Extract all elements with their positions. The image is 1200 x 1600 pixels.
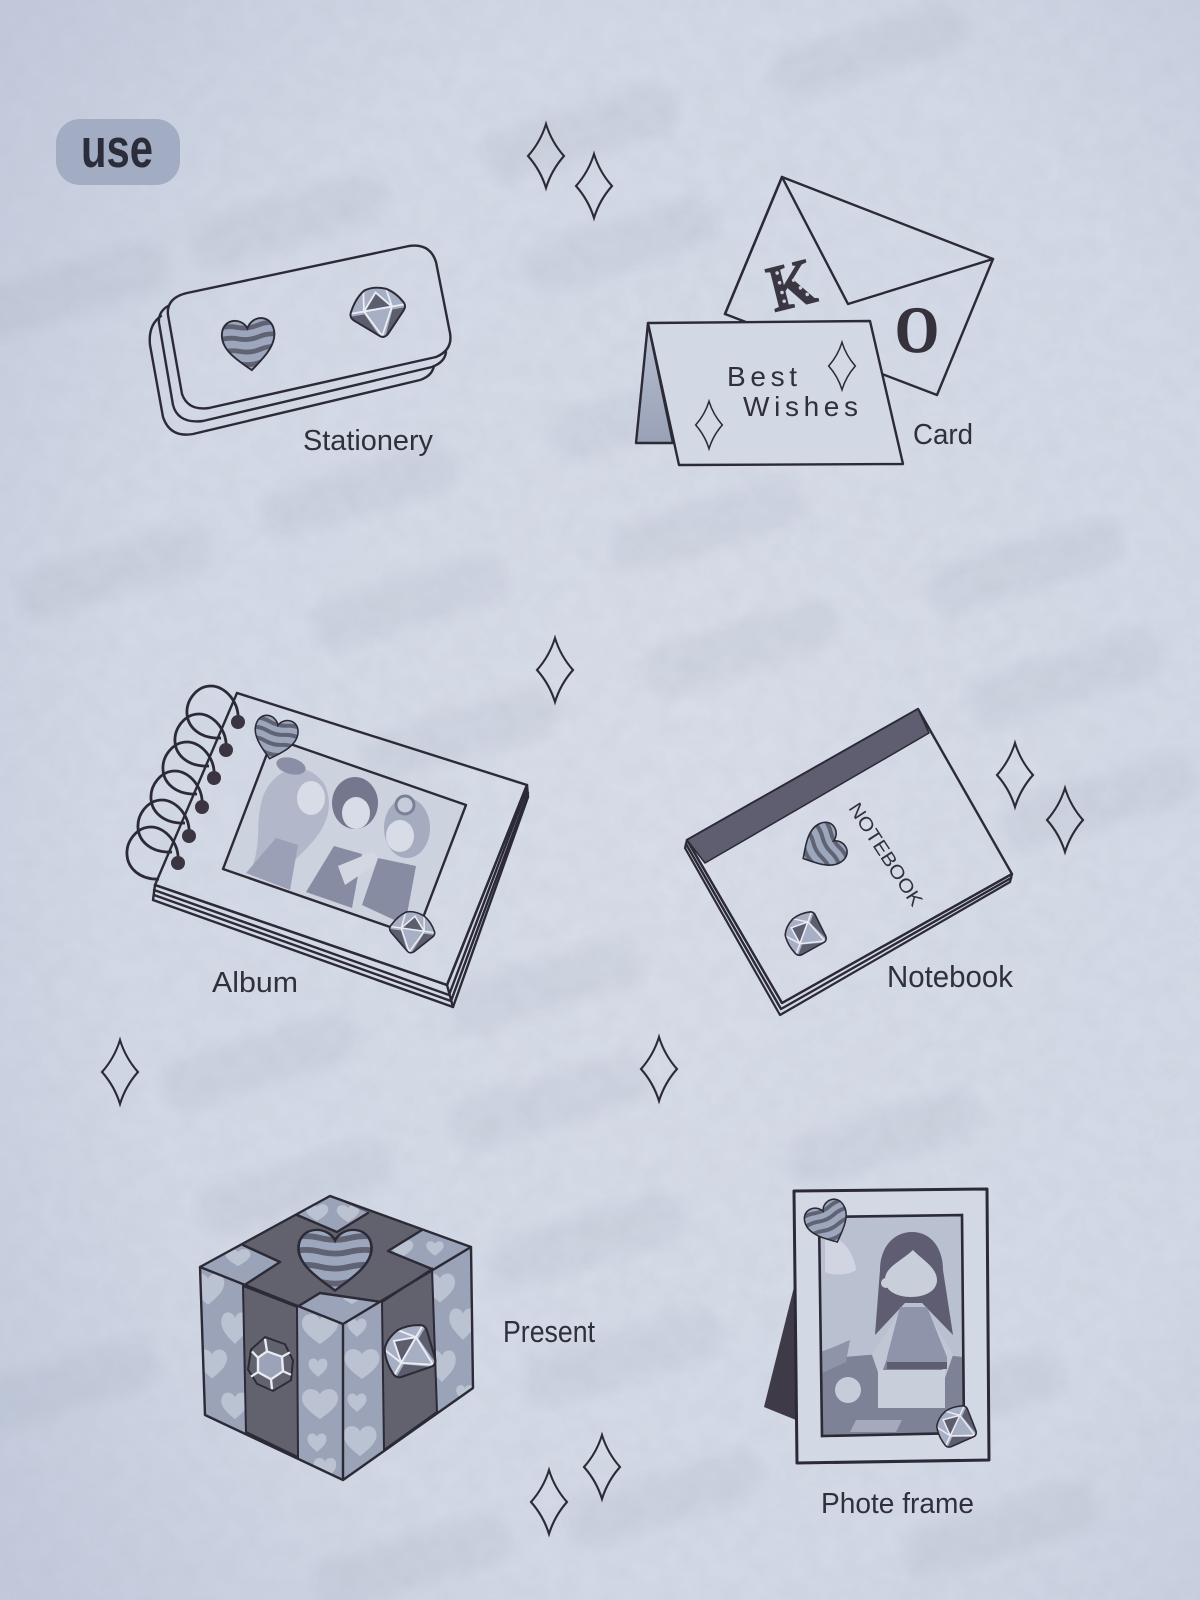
sparkle bbox=[584, 1435, 620, 1499]
icon: striped heart bbox=[215, 316, 283, 373]
item: stationery bbox=[150, 246, 450, 457]
label: Card: Card bbox=[913, 419, 973, 451]
album spine bbox=[155, 693, 237, 885]
icon: striped heart bbox=[291, 1230, 379, 1290]
sparkle bbox=[531, 1470, 567, 1534]
icon: striped heart bbox=[797, 1194, 860, 1253]
label: Stationery: Stationery bbox=[303, 425, 433, 457]
frame stand bbox=[764, 1283, 796, 1420]
letter K: K bbox=[760, 244, 823, 326]
item: card bbox=[636, 177, 993, 465]
notebook band bbox=[687, 709, 929, 863]
box outline bbox=[200, 1196, 473, 1480]
item: present bbox=[192, 1196, 595, 1480]
card front bbox=[648, 321, 903, 465]
notebook pages bbox=[685, 840, 1012, 1015]
album pages bbox=[153, 785, 528, 1007]
box left face bbox=[192, 1267, 343, 1480]
label: Album: Album bbox=[212, 967, 298, 999]
sparkle bbox=[997, 743, 1033, 807]
stationery stack bbox=[150, 246, 450, 435]
sparkle bbox=[576, 154, 612, 218]
icon: gem bbox=[929, 1398, 985, 1457]
notebook cover bbox=[687, 709, 1012, 1003]
icon: gem bbox=[374, 1313, 449, 1392]
icon: hexagonal gem bbox=[248, 1337, 293, 1391]
card greeting: Wishes bbox=[743, 391, 858, 422]
notebook title: NOTEBOOK bbox=[844, 799, 926, 911]
sparkle bbox=[1047, 788, 1083, 852]
letter O: O bbox=[895, 294, 939, 367]
box top face bbox=[200, 1196, 471, 1324]
frame outer bbox=[794, 1189, 989, 1463]
item: photo frame bbox=[764, 1189, 989, 1520]
icon: striped heart bbox=[790, 814, 853, 881]
card greeting: Best bbox=[727, 361, 797, 392]
sparkle on card bbox=[696, 401, 722, 449]
label: Notebook: Notebook bbox=[887, 959, 1013, 994]
label: Present: Present bbox=[503, 1314, 595, 1349]
sparkle bbox=[537, 638, 573, 702]
heading pill: use bbox=[56, 117, 180, 185]
sparkle bbox=[641, 1037, 677, 1101]
icon: gem bbox=[385, 909, 439, 956]
heading pill: use: use bbox=[81, 117, 153, 179]
sparkle on card bbox=[829, 342, 855, 390]
framed picture of a girl bbox=[815, 1215, 970, 1440]
sparkle bbox=[102, 1040, 138, 1104]
box right face bbox=[343, 1247, 477, 1480]
item: album bbox=[127, 686, 528, 1007]
card back flap bbox=[636, 323, 673, 443]
icon: striped heart bbox=[245, 712, 305, 765]
album cover bbox=[155, 693, 527, 985]
sparkle bbox=[528, 124, 564, 188]
photo bbox=[223, 738, 466, 936]
spiral rings bbox=[127, 686, 245, 879]
icon: gem bbox=[345, 283, 411, 342]
icon: gem bbox=[779, 905, 834, 964]
envelope bbox=[725, 177, 993, 395]
card greeting bbox=[727, 361, 858, 422]
label: Phote frame: Phote frame bbox=[821, 1488, 974, 1520]
item: notebook bbox=[685, 709, 1013, 1015]
